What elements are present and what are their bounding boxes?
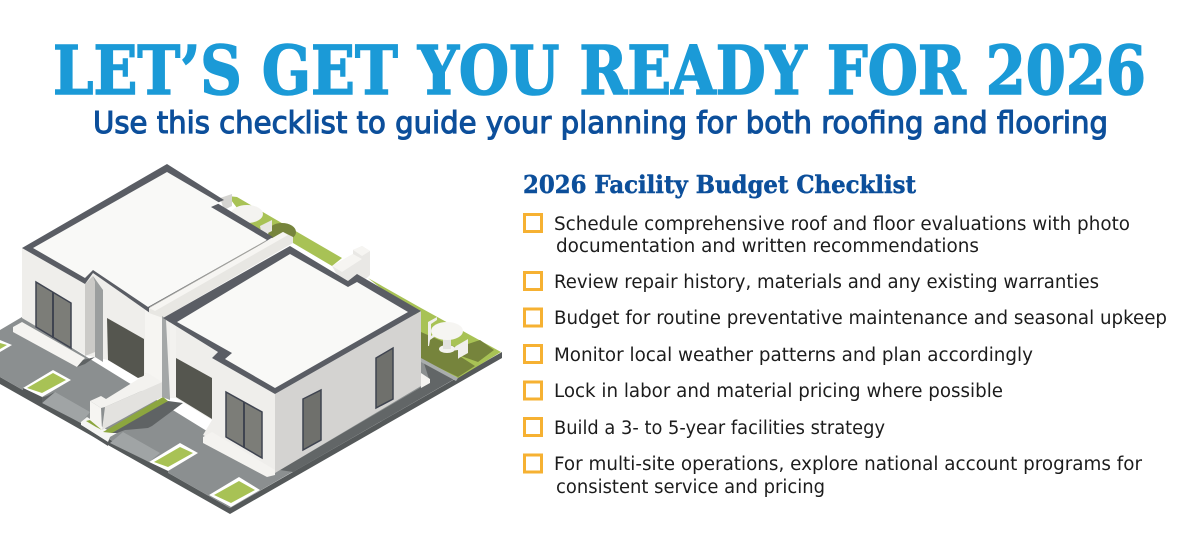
wing one window <box>36 282 71 348</box>
checklist item 4: Monitor local weather patterns and plan accordingly <box>554 345 1033 366</box>
wing one garage door <box>107 318 144 378</box>
wing two side windows <box>303 348 393 450</box>
ground slab <box>0 317 502 514</box>
checklist item 3: Budget for routine preventative maintenance and seasonal upkeep <box>554 308 1167 329</box>
checklist item 2: Review repair history, materials and any existing warranties <box>554 272 1099 293</box>
wing one plinth <box>13 322 95 367</box>
roof one <box>22 164 293 318</box>
checklist heading: 2026 Facility Budget Checklist <box>523 170 916 199</box>
back lawn <box>228 196 501 381</box>
front garden wall <box>81 373 183 446</box>
checklist item 1: documentation and written recommendations <box>556 236 979 257</box>
front patio table and chairs <box>428 317 468 359</box>
illustration: isometric building <box>0 164 502 514</box>
wing two front window <box>226 392 262 458</box>
wing two garage door <box>176 358 212 419</box>
wing two plinth <box>203 373 430 477</box>
rear patio furniture <box>220 194 272 236</box>
wing two walls <box>162 311 421 473</box>
checklist item 7: For multi-site operations, explore national account programs for <box>554 454 1142 475</box>
planters <box>0 340 260 507</box>
checklist item 5: Lock in labor and material pricing where possible <box>554 381 1003 402</box>
subtitle: Use this checklist to guide your planning for both roofing and flooring <box>93 106 1108 141</box>
checklist item 1 <box>524 214 1130 257</box>
wall post <box>332 246 370 287</box>
wing one walls <box>22 248 163 382</box>
checklist item 7: consistent service and pricing <box>556 477 825 498</box>
roof two <box>163 246 421 394</box>
checklist item 1: Schedule comprehensive roof and floor evaluations with photo <box>554 214 1130 235</box>
checklist item 7 <box>524 454 1142 498</box>
checklist item 6: Build a 3- to 5-year facilities strategy <box>554 418 885 439</box>
